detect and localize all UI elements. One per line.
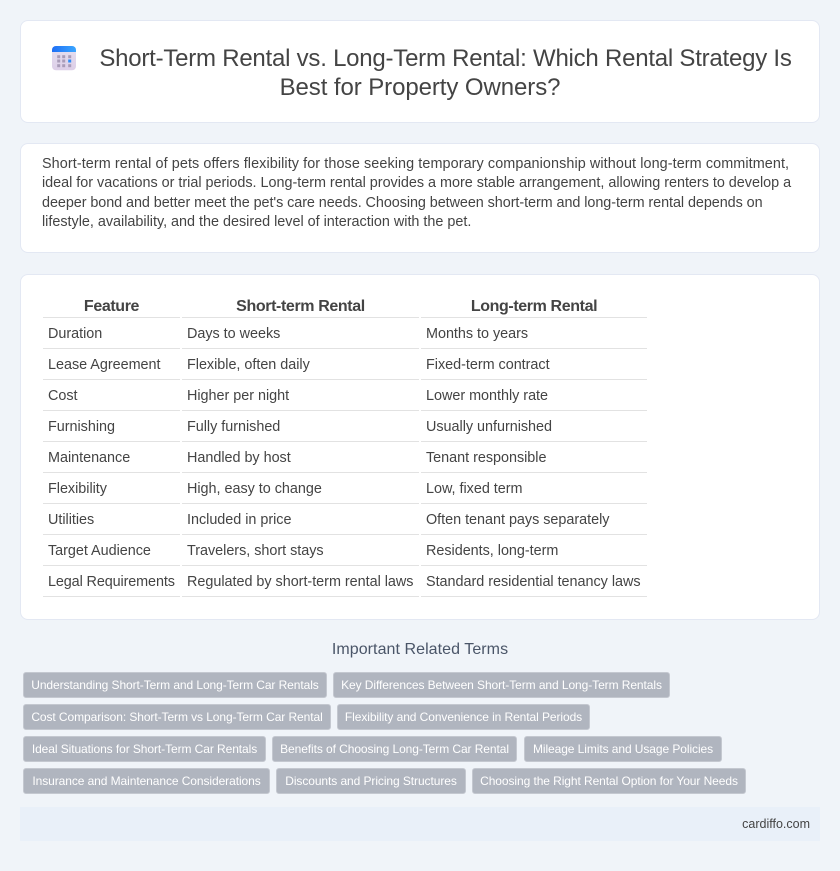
panel: related term tags: Benefits of Choosing Long-Term Car Rental [280, 742, 509, 756]
panel: comparison table: Cost [48, 388, 78, 404]
panel: comparison table: Fully furnished [187, 419, 280, 435]
panel: comparison table: Travelers, short stays [187, 543, 324, 559]
panel: comparison table: Utilities [48, 512, 94, 528]
panel: comparison table: Regulated by short-term rental laws [187, 574, 413, 590]
panel: comparison table: Long-term Rental [471, 298, 597, 315]
panel: comparison table: Flexibility [48, 481, 107, 497]
title: Short-Term Rental vs. Long-Term Rental: Which Rental Strategy Is [99, 45, 792, 72]
text block: description: deeper bond and better meet the pet's care needs. Choosing between short-term and long-term rental depends on [42, 195, 763, 211]
panel: comparison table: Duration [48, 326, 102, 342]
footer [20, 807, 820, 841]
panel: related term tags: Choosing the Right Rental Option for Your Needs [480, 774, 738, 788]
panel: comparison table: Included in price [187, 512, 291, 528]
panel: related term tags: Ideal Situations for Short-Term Car Rentals [32, 742, 257, 756]
panel: comparison table: Target Audience [48, 543, 151, 559]
panel: related term tags: Discounts and Pricing Structures [285, 774, 457, 788]
panel: comparison table: Feature [84, 298, 139, 315]
panel: comparison table: High, easy to change [187, 481, 322, 497]
text block: description: Short-term rental of pets offers flexibility for those seeking temporary companionship without long-term commitment, [42, 156, 789, 172]
heading: important related terms: Important Related Terms [332, 641, 508, 658]
title: Best for Property Owners? [280, 74, 560, 101]
panel: related term tags: Key Differences Between Short-Term and Long-Term Rentals [341, 678, 662, 692]
panel: comparison table: Furnishing [48, 419, 115, 435]
panel: related term tags: Flexibility and Convenience in Rental Periods [345, 710, 582, 724]
panel: header [20, 20, 820, 123]
panel: comparison table: Short-term Rental [236, 298, 365, 315]
footer credit: cardiffo.com [742, 817, 810, 831]
title [99, 45, 792, 101]
panel: comparison table: Usually unfurnished [426, 419, 552, 435]
panel: comparison table: Legal Requirements [48, 574, 175, 590]
panel: comparison table [20, 274, 820, 620]
icon: calendar [52, 46, 76, 70]
panel: comparison table: Residents, long-term [426, 543, 558, 559]
panel: related term tags: Cost Comparison: Short-Term vs Long-Term Car Rental [31, 710, 323, 724]
panel: comparison table: Tenant responsible [426, 450, 546, 466]
panel: comparison table: Lower monthly rate [426, 388, 548, 404]
panel: comparison table: Maintenance [48, 450, 130, 466]
panel: comparison table: Often tenant pays separately [426, 512, 609, 528]
panel: comparison table: Low, fixed term [426, 481, 522, 497]
panel: related term tags: Mileage Limits and Usage Policies [533, 742, 713, 756]
panel: related term tags [23, 672, 746, 794]
panel: comparison table: Higher per night [187, 388, 289, 404]
panel: description [20, 143, 820, 253]
panel: comparison table: Months to years [426, 326, 528, 342]
panel: related term tags: Insurance and Maintenance Considerations [32, 774, 261, 788]
panel: comparison table: Fixed-term contract [426, 357, 550, 373]
panel: related term tags: Understanding Short-Term and Long-Term Car Rentals [31, 678, 319, 692]
panel: comparison table: Standard residential tenancy laws [426, 574, 641, 590]
text block: description [42, 156, 792, 230]
panel: comparison table: Handled by host [187, 450, 291, 466]
panel: comparison table: Lease Agreement [48, 357, 161, 373]
text block: description: ideal for vacations or trial periods. Long-term rental provides a more stable arrangement, allowing renters to develop a [42, 175, 791, 191]
panel: comparison table: Flexible, often daily [187, 357, 310, 373]
panel: comparison table: Days to weeks [187, 326, 280, 342]
text block: description: lifestyle, availability, and the desired level of interaction with the pet. [42, 214, 471, 230]
